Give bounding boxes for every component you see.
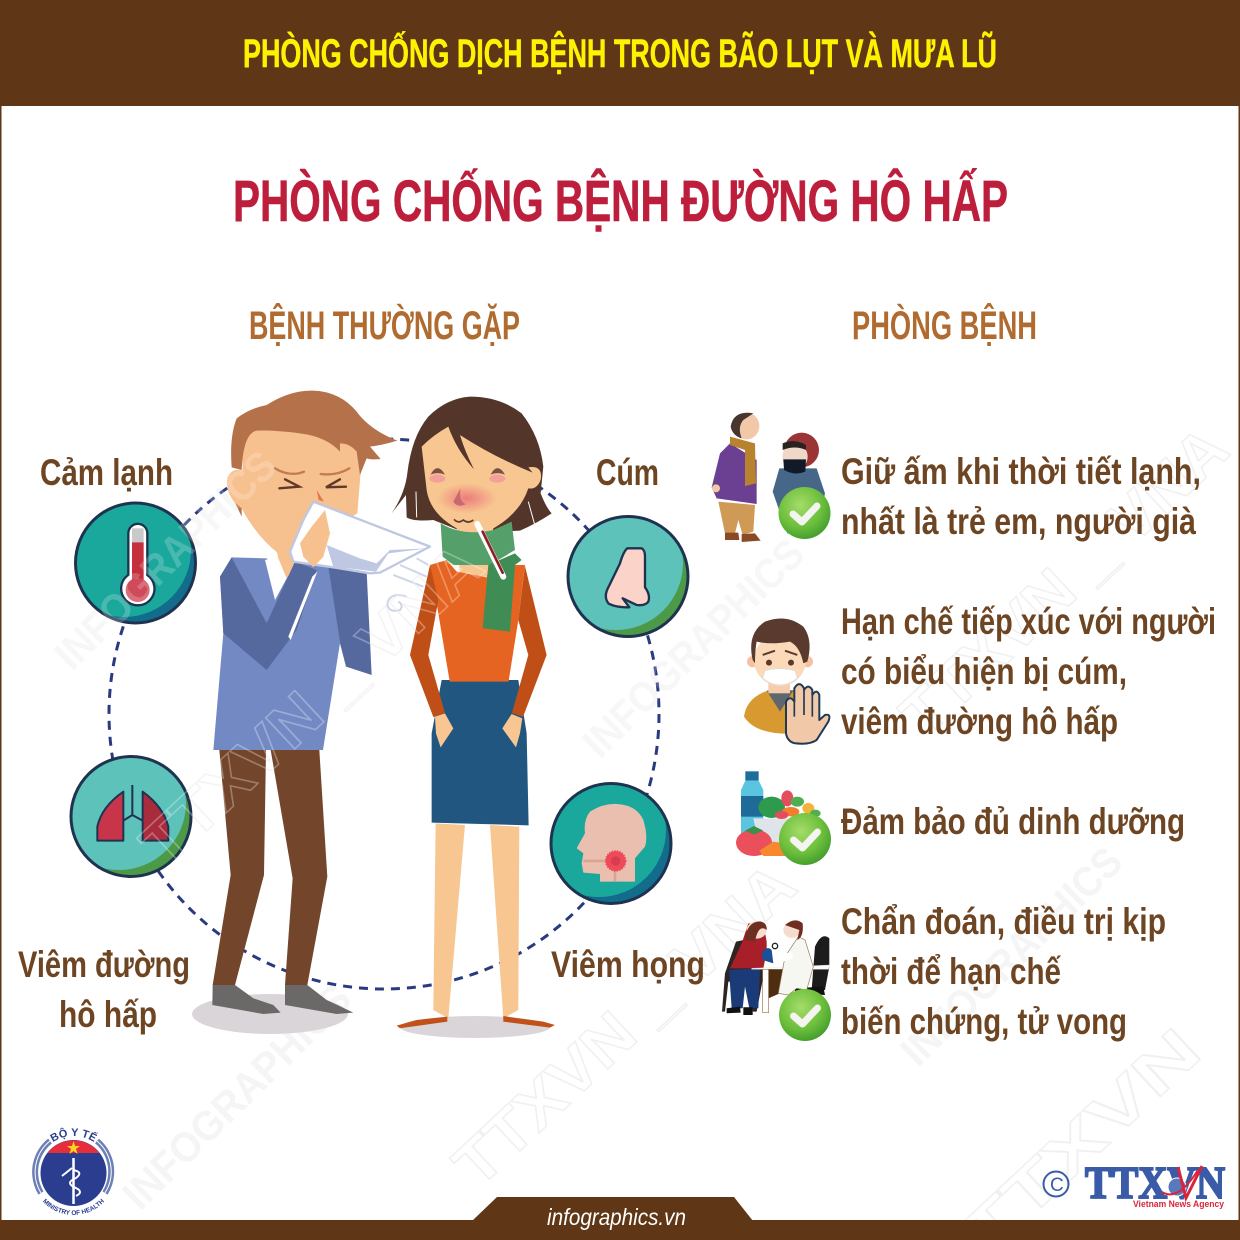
icon: lungs	[70, 755, 192, 878]
woman sleeves	[410, 565, 547, 717]
woman legs	[433, 823, 519, 1018]
text: early diagnosis: thời để hạn chế	[841, 951, 1061, 992]
woman back hair	[392, 397, 552, 533]
website address: infographics.vn	[547, 1204, 686, 1230]
watermark overlay on artwork: TTXVN _ VNA	[127, 530, 496, 880]
text: keep warm	[841, 451, 1201, 542]
label: sore throat: Viêm họng	[551, 944, 705, 985]
label: respiratory tract inflammation: Viêm đường	[18, 944, 190, 985]
icon: nose	[566, 515, 690, 638]
woman shoes	[397, 1016, 555, 1028]
prevention item 3: nutrition	[736, 771, 1185, 865]
watermarks: TTXVN _ VNA	[887, 413, 1240, 750]
man legs	[213, 750, 327, 985]
logo: Ministry of Health: MINISTRY OF HEALTH	[42, 1198, 104, 1215]
check badge	[778, 487, 830, 539]
label: respiratory tract inflammation: hô hấp	[59, 994, 157, 1035]
man shoes	[212, 985, 353, 1014]
thermometer in mouth	[477, 524, 503, 577]
tagline: Vietnam News Agency	[1133, 1199, 1224, 1209]
man shirt collar	[265, 557, 289, 600]
icon: thermometer	[74, 502, 197, 624]
woman shadow	[400, 1016, 550, 1038]
icon: doctor and patient	[722, 920, 830, 1015]
prevention item 4: early diagnosis	[722, 901, 1166, 1042]
watermarks: TTXVN _ VNA	[440, 850, 809, 1200]
man hair	[231, 391, 397, 517]
watermark overlay on artwork	[45, 442, 813, 880]
text: early diagnosis	[841, 901, 1166, 1042]
woman neck	[457, 527, 493, 577]
man face details	[275, 468, 349, 488]
woman skirt	[432, 680, 529, 825]
watermarks: INFOGRAPHICS	[113, 975, 360, 1218]
woman top	[430, 560, 525, 683]
illustration: man sneezing	[192, 391, 430, 1034]
woman skirt top	[441, 682, 516, 702]
icon: elderly man and child	[712, 413, 825, 542]
watermarks: INFOGRAPHICS	[891, 838, 1131, 1074]
woman face	[422, 427, 541, 532]
illustration: woman with thermometer	[392, 397, 555, 1038]
tissue	[290, 502, 430, 573]
top header bar	[0, 0, 1240, 106]
watermark overlay on artwork: INFOGRAPHICS	[45, 442, 285, 678]
label: flu: Cúm	[596, 452, 659, 493]
bottom bar with site tab	[0, 1197, 1240, 1240]
prevention item 1: keep warm	[712, 413, 1201, 542]
text: limit contact	[841, 601, 1216, 742]
disease labels	[18, 452, 705, 1035]
watermarks: INFOGRAPHICS	[573, 530, 813, 766]
text: limit contact: có biểu hiện bị cúm,	[841, 651, 1127, 692]
logo: Ministry of Health: BỘ Y TẾ	[50, 1128, 98, 1142]
man sweater	[213, 557, 340, 750]
copyright symbol: C	[1050, 1175, 1064, 1196]
prevention item 2: limit contact	[744, 601, 1216, 744]
man shadow	[192, 994, 348, 1034]
man sweater dark V	[220, 557, 317, 670]
woman scarf	[441, 522, 522, 632]
icon: masked boy with raised hand	[744, 618, 829, 744]
dashed ring connecting the diseases	[109, 439, 659, 989]
sneeze lines	[387, 558, 428, 611]
woman face details	[429, 468, 505, 522]
text: early diagnosis: Chẩn đoán, điều trị kịp	[841, 901, 1166, 942]
label: common cold: Cảm lạnh	[40, 452, 173, 493]
check badge	[779, 813, 831, 865]
watermarks: INFOGRAPHICS	[45, 442, 285, 678]
man head	[227, 430, 362, 560]
watermarks	[45, 413, 1240, 1240]
text: early diagnosis: biến chứng, tử vong	[841, 1001, 1127, 1042]
text: limit contact: viêm đường hô hấp	[841, 701, 1118, 742]
logo: Ministry of Health	[32, 1128, 114, 1215]
label: respiratory tract inflammation	[18, 944, 190, 1035]
heading: prevention: PHÒNG BỆNH	[852, 302, 1037, 348]
icon: bottle and food	[736, 771, 821, 856]
woman hands	[435, 713, 522, 747]
watermarks: TTXVN _ VNA	[127, 530, 496, 880]
heading: common diseases: BỆNH THƯỜNG GẶP	[249, 302, 520, 348]
logo: TTXVN	[1044, 1157, 1225, 1209]
check badge	[779, 989, 831, 1041]
man neck	[275, 543, 300, 578]
icon: throat	[550, 782, 672, 905]
copyright symbol	[1044, 1172, 1068, 1196]
watermark overlay on artwork: INFOGRAPHICS	[573, 530, 813, 766]
